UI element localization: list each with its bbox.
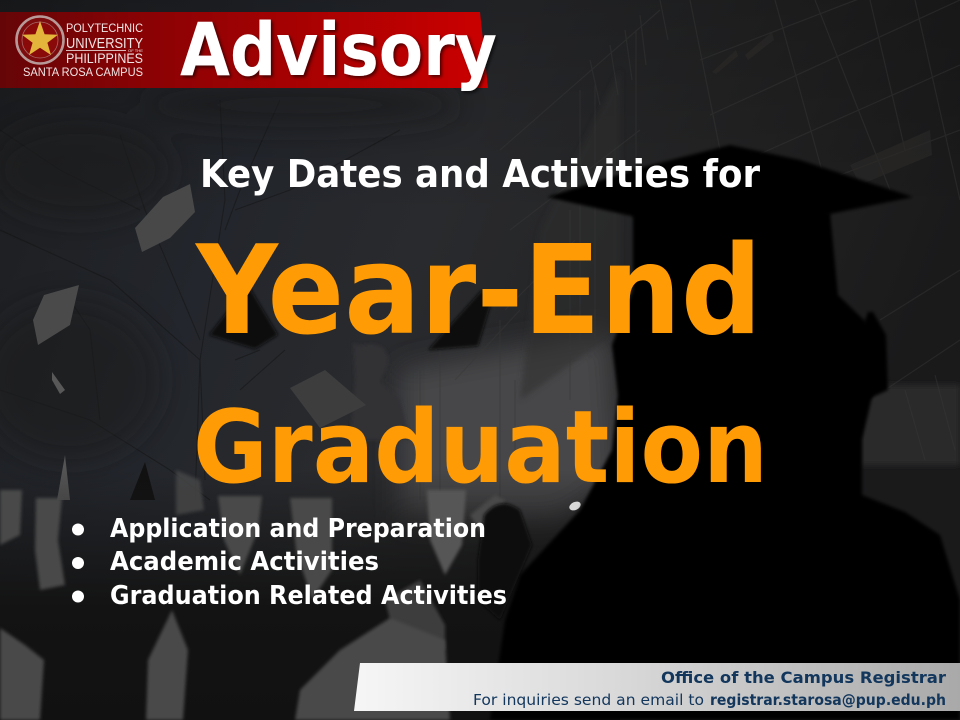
tassel — [860, 312, 888, 400]
raised light hand — [57, 455, 70, 500]
red banner shape — [0, 12, 488, 88]
flying caps and background graduate — [33, 184, 492, 500]
title: Graduation: Graduation — [193, 388, 768, 506]
foreground head — [478, 504, 532, 620]
footer contact bar — [354, 663, 960, 711]
distant graduate figure — [350, 340, 410, 440]
gray scrap left — [52, 372, 65, 394]
university name: PHILIPPINES — [66, 50, 143, 66]
university name: SANTA ROSA CAMPUS — [23, 67, 143, 79]
background: tree foliage — [0, 83, 460, 460]
title: Year-End: Year-End — [194, 220, 762, 363]
gray diploma cap — [290, 370, 366, 428]
footer background — [354, 663, 960, 711]
subtitle: Key Dates and Activities for — [200, 152, 760, 197]
email address: registrar.starosa@pup.edu.ph — [710, 691, 946, 709]
university name: POLYTECHNIC — [66, 23, 143, 35]
background: tree branches — [0, 100, 400, 500]
bullet: application: Application and Preparation — [110, 514, 486, 544]
mortarboard — [547, 145, 913, 225]
main graduate silhouette with cap — [478, 145, 960, 720]
bullet list — [72, 514, 507, 611]
crowd: bright diploma glint — [568, 500, 582, 512]
advisory heading: Advisory — [180, 8, 497, 93]
crowd: gray gown patches — [0, 610, 450, 720]
dark cap right of title — [428, 290, 492, 350]
dark cap behind title — [209, 285, 278, 349]
university name: OF THE — [128, 49, 144, 53]
crowd: gray raised arms — [0, 470, 505, 650]
bullet: academic: Academic Activities — [110, 547, 379, 577]
inquiry line: For inquiries send an email to — [473, 691, 704, 709]
university name — [23, 23, 144, 79]
gray cap upper left — [135, 184, 195, 252]
gray cap left — [33, 285, 79, 345]
university name: UNIVERSITY — [66, 35, 143, 52]
university seal — [16, 16, 64, 64]
head and shoulders — [490, 212, 960, 720]
advisory banner — [0, 8, 497, 93]
office name: Office of the Campus Registrar — [661, 668, 946, 687]
bullet: graduation related: Graduation Related Activities — [110, 581, 507, 611]
raised dark hand — [130, 462, 155, 500]
crowd: darkening lower area — [0, 470, 620, 720]
background: dark transom panes — [712, 32, 932, 185]
background: building window grid — [420, 0, 960, 500]
